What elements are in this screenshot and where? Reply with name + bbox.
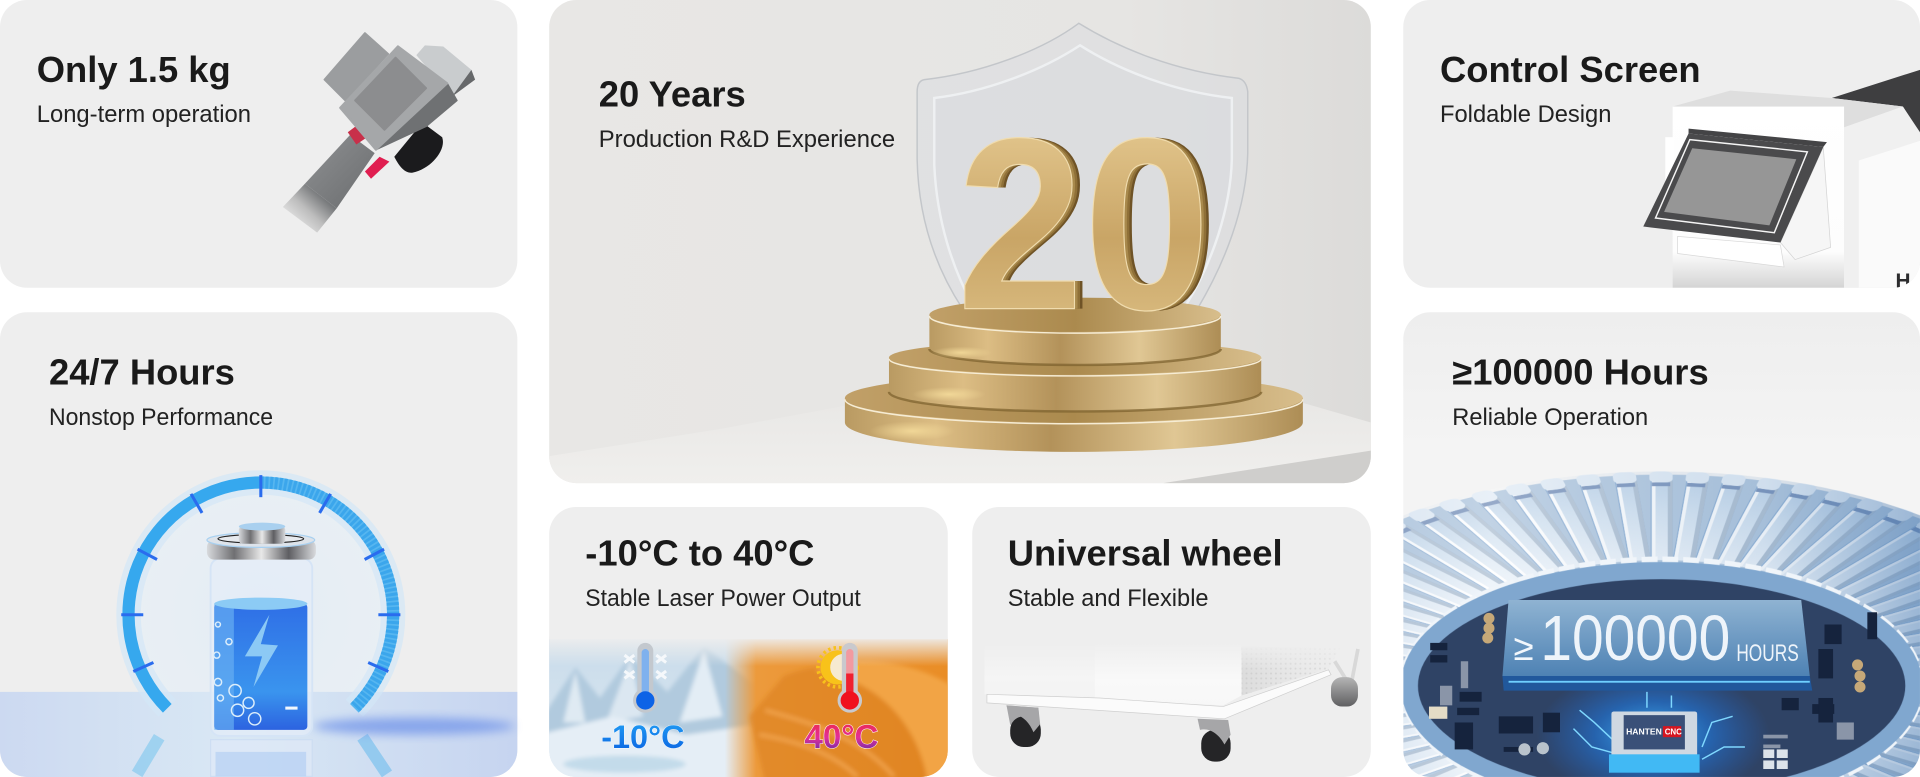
heading: 100000 hours: ≥100000 Hours — [1452, 352, 1709, 393]
icon: hot thermometer — [818, 643, 862, 713]
board components — [1429, 612, 1877, 769]
front right caster — [1198, 719, 1231, 762]
panel: 24/7 hours — [0, 312, 517, 777]
heading: universal wheel: Universal wheel — [1008, 533, 1283, 574]
cooling fins and ring — [1403, 465, 1920, 777]
platform — [549, 394, 1371, 483]
heading: temperature range: -10°C to 40°C — [585, 533, 814, 574]
panel: 100000 hours — [1403, 312, 1920, 777]
display plate: ≥ — [1513, 627, 1534, 668]
platform edge shadow — [1163, 451, 1371, 483]
panel: control screen — [1403, 0, 1920, 293]
icon: gold number 20: 20 — [962, 88, 1216, 361]
icon: battery — [207, 523, 316, 776]
icon: handheld laser head — [283, 33, 475, 233]
panel: temperature range — [539, 507, 953, 777]
panel: 20 years — [549, 0, 1371, 483]
illustration: circuit board and cooling ring — [1403, 465, 1920, 777]
illustration: machine base with casters — [984, 643, 1358, 762]
heading: 24/7 hours: 24/7 Hours — [49, 352, 235, 393]
display plate — [1502, 600, 1812, 691]
scene: snow and desert — [539, 637, 953, 777]
rear caster — [1331, 649, 1358, 707]
icon: cold thermometer — [624, 643, 666, 713]
chart: charge gauge — [121, 475, 400, 774]
label: 40°C: 40°C — [804, 719, 878, 756]
panel: universal wheel — [972, 507, 1371, 777]
floor — [0, 692, 517, 777]
heading: only 1.5 kg: Only 1.5 kg — [37, 49, 231, 90]
subtext: stable laser power output: Stable Laser Power Output — [585, 585, 861, 612]
subtext: production experience: Production R&D Experience — [599, 126, 895, 153]
chip with logo: CNC — [1665, 728, 1682, 737]
subtext: nonstop performance: Nonstop Performance — [49, 404, 273, 431]
icon: gold number 20: 20 — [957, 88, 1210, 361]
illustration: machine with control screen — [1643, 70, 1920, 293]
display plate: 100000 — [1540, 603, 1730, 674]
gauge halo — [116, 470, 405, 759]
subtext: foldable design: Foldable Design — [1440, 101, 1611, 128]
display plate: HOURS — [1736, 640, 1799, 667]
front left caster — [1007, 705, 1041, 747]
chip with logo — [1609, 711, 1700, 773]
chip with logo: HANTEN — [1626, 727, 1662, 737]
subtext: stable and flexible: Stable and Flexible — [1008, 585, 1209, 612]
icon: glass shield — [917, 23, 1248, 309]
battery shadow — [313, 718, 514, 735]
base plate — [987, 670, 1331, 719]
icon: gold podium — [845, 298, 1303, 452]
icon: gold number 20: 20 — [965, 88, 1218, 361]
icon: gold number 20: 20 — [960, 88, 1213, 361]
heading: 20 years: 20 Years — [599, 74, 746, 115]
illustration: machine with control screen: H — [1896, 270, 1911, 293]
heading: control screen: Control Screen — [1440, 49, 1701, 90]
panel: only 1.5 kg — [0, 0, 517, 288]
subtext: reliable operation: Reliable Operation — [1452, 404, 1648, 431]
subtext: long-term operation: Long-term operation — [37, 101, 251, 128]
label: -10°C: -10°C — [601, 719, 685, 755]
